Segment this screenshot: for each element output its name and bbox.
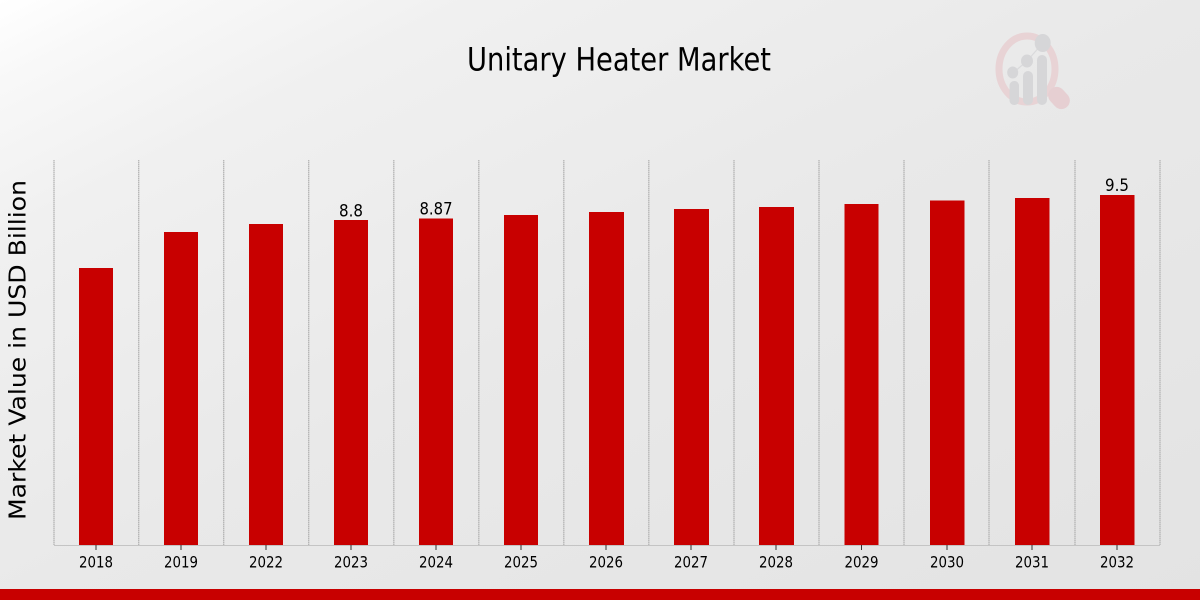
- bar 2031: [1015, 198, 1050, 545]
- bar 2032: [1100, 195, 1134, 545]
- x-axis labels: 2025: [504, 552, 538, 572]
- x-axis labels: 2018: [79, 552, 113, 572]
- icon: magnifier logo watermark: [999, 34, 1073, 113]
- x-axis labels: 2022: [249, 552, 283, 572]
- x-axis labels: 2023: [334, 552, 368, 572]
- value label 2024: 8.87: [420, 200, 452, 220]
- y-axis label: Market Value in USD Billion: [6, 180, 32, 520]
- value label 2032: 9.5: [1105, 176, 1129, 196]
- x-axis labels: 2029: [844, 552, 878, 572]
- title: Unitary Heater Market: [467, 40, 771, 78]
- bar 2019: [164, 232, 198, 545]
- bar chart: [79, 195, 1134, 545]
- bar 2018: [79, 268, 113, 545]
- x-axis labels: 2026: [589, 552, 623, 572]
- bar 2030: [930, 200, 964, 545]
- x-axis labels: 2030: [930, 552, 964, 572]
- x-axis labels: 2031: [1015, 552, 1049, 572]
- value label 2023: 8.8: [339, 202, 363, 222]
- bar 2025: [504, 215, 538, 545]
- x-axis labels: 2024: [419, 552, 453, 572]
- bar 2024: [419, 218, 453, 545]
- x-axis labels: 2032: [1100, 552, 1134, 572]
- x-axis labels: 2027: [674, 552, 708, 572]
- bar 2027: [674, 209, 709, 545]
- bar 2028: [759, 207, 794, 545]
- x-axis labels: 2028: [759, 552, 793, 572]
- bar 2022: [249, 224, 283, 545]
- bar 2026: [589, 212, 624, 545]
- bar 2029: [844, 204, 878, 545]
- x-axis labels: [79, 552, 1134, 572]
- x-axis labels: 2019: [164, 552, 198, 572]
- footer band: [0, 589, 1200, 600]
- bar 2023: [334, 220, 368, 545]
